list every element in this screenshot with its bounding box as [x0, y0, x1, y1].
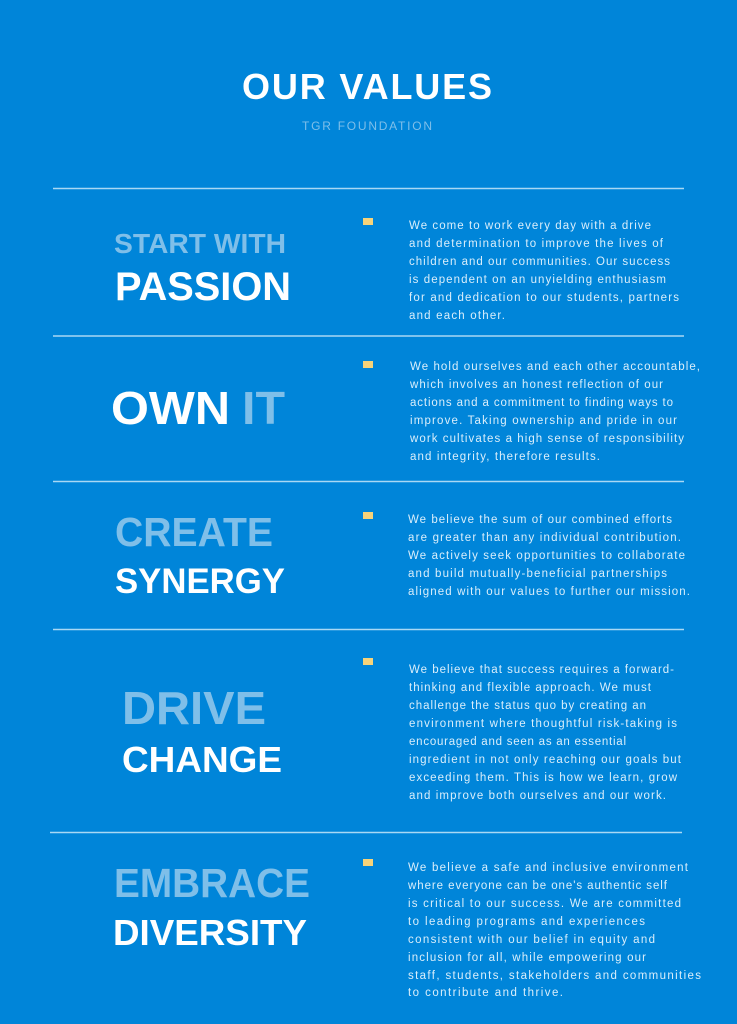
panel: own it — [111, 361, 700, 463]
text block: synergy description — [408, 514, 690, 598]
icon: yellow square bullet — [363, 658, 373, 665]
text block: diversity description — [407, 862, 701, 999]
heading: create synergy: SYNERGY — [115, 562, 285, 601]
text block: drive change description: exceeding them. This is how we learn, grow — [409, 772, 678, 784]
text block: own it description: and integrity, therefore results. — [410, 451, 600, 463]
text block: drive change description: challenge the status quo by creating an — [409, 700, 646, 712]
text block: synergy description: and build mutually-beneficial partnerships — [408, 568, 667, 580]
icon: yellow square bullet — [363, 512, 373, 519]
header — [242, 66, 492, 133]
text block: diversity description: staff, students, stakeholders and communities — [408, 970, 701, 982]
text block: drive change description: ingredient in not only reaching our goals but — [409, 754, 682, 766]
heading: embrace diversity: DIVERSITY — [113, 912, 307, 953]
title: OUR VALUES — [242, 66, 492, 107]
text block: passion description: is dependent on an unyielding enthusiasm — [409, 274, 666, 286]
text block: own it description: improve. Taking ownership and pride in our — [410, 415, 677, 427]
text block: diversity description: where everyone can be one's authentic self — [407, 880, 668, 892]
heading: drive change: CHANGE — [122, 739, 282, 780]
text block: synergy description: We actively seek opportunities to collaborate — [408, 550, 685, 562]
text block: drive change description: environment where thoughtful risk-taking is — [409, 718, 677, 730]
heading: drive change: DRIVE — [122, 682, 266, 734]
text block: drive change description — [409, 664, 682, 802]
heading: embrace diversity: EMBRACE — [114, 860, 310, 906]
text block: synergy description: are greater than any individual contribution. — [408, 532, 681, 544]
text block: synergy description: We believe the sum of our combined efforts — [408, 514, 672, 526]
text block: diversity description: is critical to our success. We are committed — [408, 898, 681, 910]
text block: own it description: actions and a commitment to finding ways to — [410, 397, 673, 409]
text block: own it description: We hold ourselves and each other accountable, — [410, 361, 700, 373]
text block: drive change description: and improve both ourselves and our work. — [409, 790, 666, 802]
panel: drive change — [122, 658, 682, 802]
text block: drive change description: We believe that success requires a forward- — [409, 664, 674, 676]
heading: start with passion: START WITH — [114, 228, 286, 259]
icon: yellow square bullet — [363, 361, 373, 368]
icon: yellow square bullet — [363, 218, 373, 225]
heading: create synergy: CREATE — [115, 509, 273, 555]
text block: passion description: We come to work every day with a drive — [409, 220, 651, 232]
text block: passion description: and each other. — [409, 310, 505, 322]
text block: diversity description: We believe a safe and inclusive environment — [408, 862, 689, 874]
heading: start with passion — [114, 228, 291, 309]
text block: passion description: for and dedication to our students, partners — [409, 292, 679, 304]
text block: passion description: and determination to improve the lives of — [409, 238, 664, 250]
heading: create synergy — [115, 509, 285, 601]
heading: own it — [111, 382, 285, 434]
heading: own it: IT — [242, 382, 285, 434]
text block: synergy description: aligned with our values to further our mission. — [408, 586, 690, 598]
panel: start with passion — [114, 218, 679, 322]
heading: embrace diversity — [113, 860, 310, 953]
heading: drive change — [122, 682, 282, 780]
text block: own it description — [409, 361, 700, 463]
text block: passion description — [409, 220, 679, 322]
text block: own it description: which involves an honest reflection of our — [409, 379, 663, 391]
text block: drive change description: encouraged and seen as an essential — [409, 736, 626, 748]
subtitle: TGR FOUNDATION — [302, 119, 432, 133]
text block: diversity description: to leading programs and experiences — [408, 916, 645, 928]
panel: embrace diversity — [113, 859, 701, 999]
icon: yellow square bullet — [363, 859, 373, 866]
text block: diversity description: inclusion for all, while empowering our — [408, 952, 646, 964]
text block: passion description: children and our communities. Our success — [409, 256, 670, 268]
panel: create synergy — [115, 509, 690, 601]
text block: diversity description: consistent with our belief in equity and — [408, 934, 655, 946]
text block: own it description: work cultivates a high sense of responsibility — [409, 433, 684, 445]
text block: drive change description: thinking and flexible approach. We must — [409, 682, 652, 694]
heading: own it: OWN — [111, 382, 230, 434]
heading: start with passion: PASSION — [115, 265, 291, 309]
text block: diversity description: to contribute and thrive. — [408, 987, 563, 999]
